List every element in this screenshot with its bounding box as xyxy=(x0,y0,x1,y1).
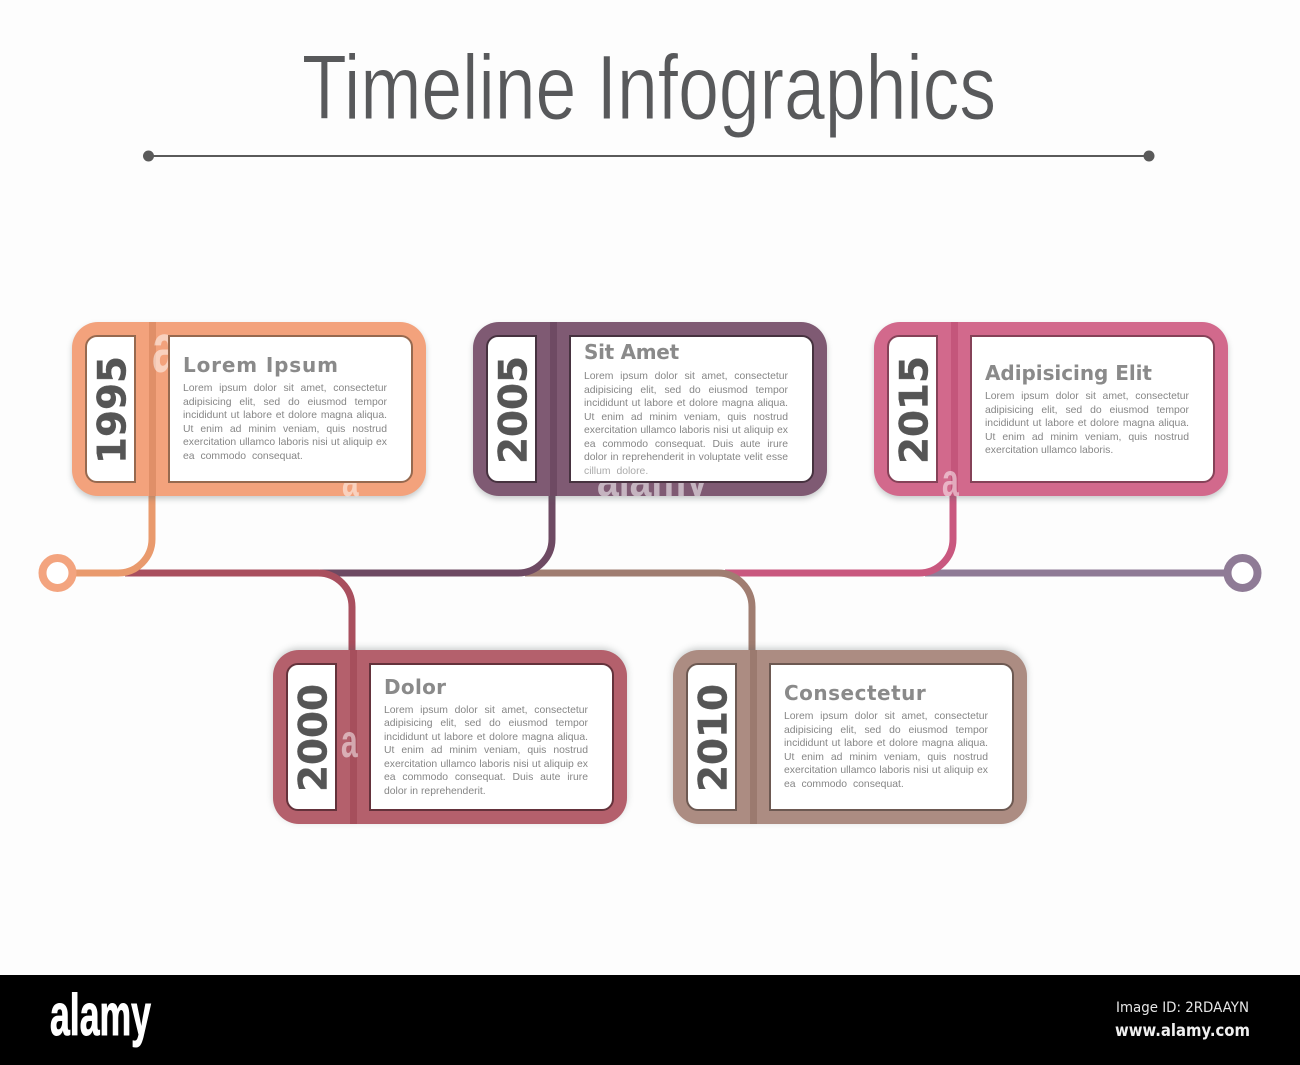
body text: incididunt ut labore et dolore magna aliqua. xyxy=(985,418,1189,429)
body text: adipisicing elit, sed do eiusmod tempor xyxy=(784,724,988,736)
body text: adipisicing elit, sed do eiusmod tempor xyxy=(584,384,788,396)
watermark: a xyxy=(152,309,177,387)
body text: adipisicing elit, sed do eiusmod tempor xyxy=(183,396,387,408)
body text: Lorem ipsum dolor sit amet, consectetur xyxy=(183,383,387,394)
strip xyxy=(950,322,958,496)
year box xyxy=(286,663,336,811)
body text: incididunt ut labore et dolore magna aliqua. xyxy=(584,398,788,409)
body text: Ut enim ad minim veniam, quis nostrud xyxy=(183,424,387,434)
body text: Lorem ipsum dolor sit amet, consectetur xyxy=(384,704,588,716)
year: 2000 xyxy=(291,684,336,792)
year: 1995 xyxy=(90,356,135,464)
heading: Sit Amet xyxy=(584,340,679,364)
body text: ea commodo consequat. Duis aute irure xyxy=(384,772,588,783)
body text: Ut enim ad minim veniam, quis nostrud xyxy=(784,752,988,762)
body text: exercitation ullamco laboris nisi ut aliquip ex xyxy=(584,425,788,436)
body text xyxy=(183,383,387,462)
year box xyxy=(686,663,736,811)
body text: exercitation ullamco laboris nisi ut aliquip ex xyxy=(183,437,387,448)
heading: Lorem Ipsum xyxy=(183,353,339,377)
body text: incididunt ut labore et dolore magna aliqua. xyxy=(784,738,988,749)
body text: incididunt ut labore et dolore magna aliqua. xyxy=(384,732,588,742)
year: 2015 xyxy=(892,356,937,464)
year box xyxy=(486,335,536,483)
card: 1995 xyxy=(72,322,426,496)
end ring xyxy=(1228,558,1258,588)
body text: incididunt ut labore et dolore magna aliqua. xyxy=(183,410,387,421)
body text: Lorem ipsum dolor sit amet, consectetur xyxy=(784,711,988,722)
body text: Ut enim ad minim veniam, quis nostrud xyxy=(985,432,1189,442)
strip xyxy=(148,322,156,496)
body text: dolor in reprehenderit. xyxy=(384,786,486,796)
end segment: violet xyxy=(925,570,1225,576)
card: 2015 xyxy=(874,322,1228,496)
body text xyxy=(584,371,788,476)
start ring xyxy=(42,558,72,588)
footer logo: alamy xyxy=(50,983,151,1048)
connector: 2000 xyxy=(125,573,352,655)
body text: dolor in reprehenderit in voluptate velit esse xyxy=(584,452,788,463)
strip xyxy=(750,650,756,824)
strip xyxy=(550,322,556,496)
year box xyxy=(85,335,136,483)
connector: 2010 xyxy=(525,573,752,655)
body text: adipisicing elit, sed do eiusmod tempor xyxy=(985,404,1189,416)
year: 2005 xyxy=(491,356,536,464)
body text: Lorem ipsum dolor sit amet, consectetur xyxy=(985,391,1189,402)
body text xyxy=(384,704,588,796)
heading: Adipisicing Elit xyxy=(985,361,1152,385)
body text: cillum dolore. xyxy=(584,466,648,476)
body text xyxy=(784,711,988,790)
heading: Consectetur xyxy=(784,681,926,705)
body text: exercitation ullamco laboris nisi ut aliquip ex xyxy=(384,758,588,770)
body text: exercitation ullamco laboris nisi ut aliquip ex xyxy=(784,765,988,776)
text box xyxy=(970,335,1215,483)
text box xyxy=(569,335,814,483)
footer bar xyxy=(0,975,1300,1065)
connector: 2005 xyxy=(320,490,552,573)
body text: Ut enim ad minim veniam, quis nostrud xyxy=(584,412,788,422)
body text: exercitation ullamco laboris. xyxy=(985,445,1113,456)
heading: Dolor xyxy=(384,675,446,699)
title rule xyxy=(143,150,1154,162)
connector: 2015 xyxy=(725,490,953,573)
body text: ea commodo consequat. Duis aute irure xyxy=(584,438,788,450)
title: Timeline Infographics xyxy=(302,37,996,139)
watermark: a xyxy=(942,454,958,506)
connector: 1995 xyxy=(74,490,152,573)
body text: ea commodo consequat. xyxy=(183,450,303,462)
text box xyxy=(369,663,614,811)
watermark bottom: a xyxy=(342,454,358,506)
card: 2005 xyxy=(472,322,827,496)
watermark: a xyxy=(340,715,357,767)
image id: Image ID: 2RDAAYN xyxy=(1116,1000,1249,1016)
text box xyxy=(168,335,413,483)
body text: ea commodo consequat. xyxy=(784,778,904,790)
card: 2000 xyxy=(272,650,627,824)
footer url: www.alamy.com xyxy=(1115,1021,1250,1040)
year: 2010 xyxy=(691,684,736,792)
body text: adipisicing elit, sed do eiusmod tempor xyxy=(384,718,588,729)
body text: Ut enim ad minim veniam, quis nostrud xyxy=(384,745,588,756)
card: 2010 xyxy=(672,650,1027,824)
text box xyxy=(769,663,1014,811)
body text xyxy=(985,391,1189,456)
body text: Lorem ipsum dolor sit amet, consectetur xyxy=(584,371,788,382)
year box xyxy=(887,335,938,483)
strip xyxy=(350,650,356,824)
